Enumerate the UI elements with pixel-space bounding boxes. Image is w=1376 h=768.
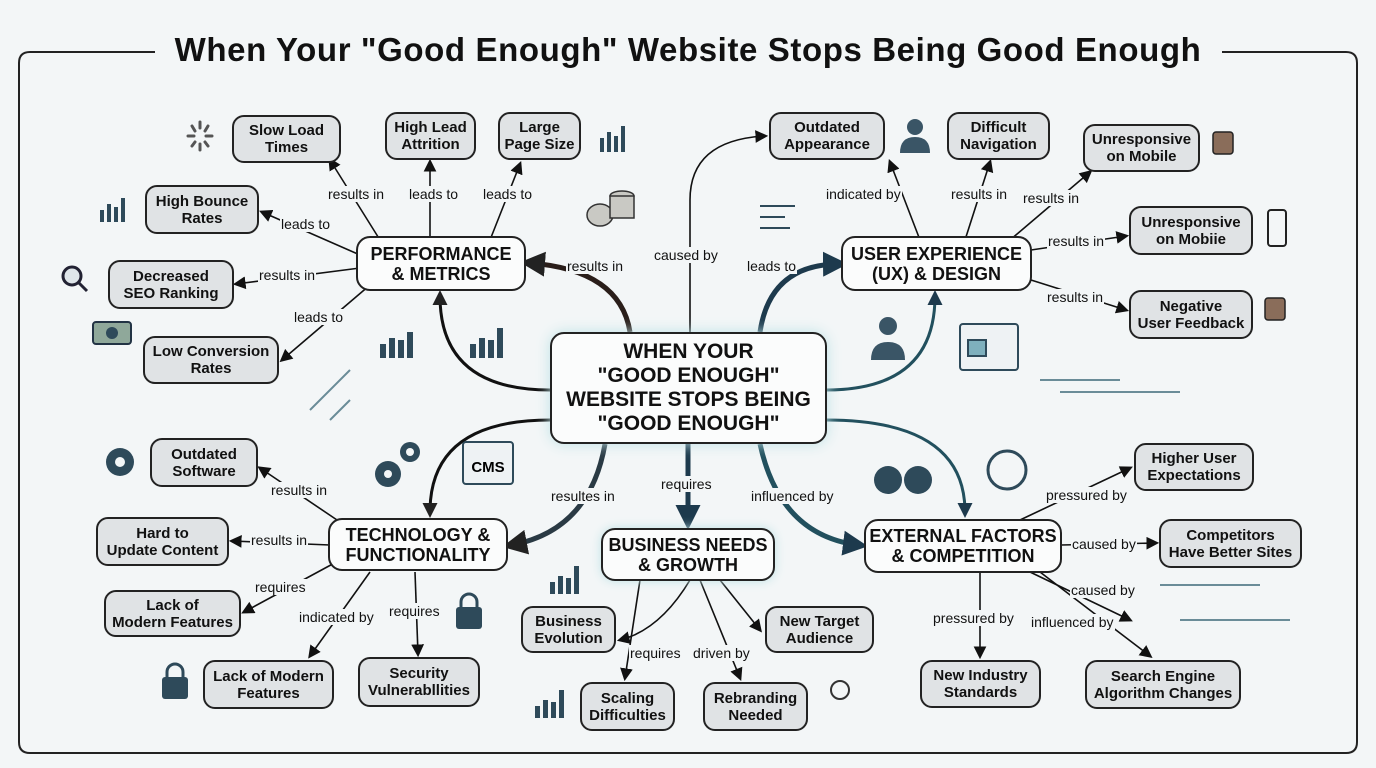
text: results in — [1047, 289, 1103, 305]
text: Decreased — [133, 268, 209, 284]
text: Rates — [182, 210, 222, 226]
icon: list — [760, 206, 795, 228]
text: Low Conversion — [153, 343, 269, 360]
text: Audience — [786, 630, 853, 646]
text: Hard to — [136, 524, 189, 542]
text: requires — [630, 645, 681, 661]
text: Standards — [944, 684, 1017, 701]
text: leads to — [281, 216, 330, 232]
leaves: Slow Load — [249, 122, 324, 139]
text: caused by — [1072, 536, 1136, 552]
icon: binoculars — [874, 466, 932, 494]
text: Rebranding — [714, 690, 797, 706]
text: Unresponsive — [1141, 214, 1241, 230]
text: Difficult — [971, 119, 1026, 136]
hub: technology: FUNCTIONALITY — [346, 544, 490, 564]
text: Outdated — [794, 119, 860, 136]
hub: technology: TECHNOLOGY & — [346, 524, 490, 544]
text: Page Size — [504, 136, 575, 153]
icon: locks — [162, 607, 482, 699]
decorative speed lines — [310, 370, 1290, 620]
text: results in — [328, 186, 384, 202]
text: results in — [271, 482, 327, 498]
hub: performance: & METRICS — [391, 264, 490, 284]
text: results in — [1048, 233, 1104, 249]
text: leads to — [747, 258, 796, 274]
icon: cms: CMS — [471, 459, 505, 476]
text: High Bounce — [156, 192, 248, 210]
hub: external: EXTERNAL FACTORS — [869, 526, 1057, 546]
icon: spinner — [188, 122, 212, 150]
text: Features — [237, 684, 300, 702]
text: influenced by — [751, 488, 834, 504]
text: Navigation — [960, 136, 1037, 153]
leaves — [232, 115, 341, 163]
text: results in — [251, 532, 307, 548]
text: Scaling — [601, 690, 654, 706]
text: New Industry — [933, 667, 1028, 684]
text: caused by — [1071, 582, 1135, 598]
hub: business: & GROWTH — [638, 554, 738, 574]
text: Algorithm Changes — [1094, 684, 1232, 702]
text: User Feedback — [1138, 314, 1244, 332]
text: Search Engine — [1111, 668, 1215, 684]
text: requires — [389, 603, 440, 619]
icon: cms — [463, 442, 513, 484]
icon: compass — [988, 451, 1026, 489]
text: influenced by — [1031, 614, 1114, 630]
text: Unresponsive — [1092, 131, 1191, 148]
text: resultes in — [551, 488, 615, 504]
icon: people — [871, 119, 930, 360]
text: Appearance — [784, 136, 870, 153]
text: Business — [535, 612, 602, 630]
icon: phone — [1268, 210, 1286, 246]
icon: bulb — [831, 681, 849, 699]
text: results in — [259, 267, 315, 283]
text: on Mobile — [1106, 148, 1176, 165]
text: Negative — [1160, 298, 1222, 314]
text: High Lead — [394, 119, 467, 136]
text: results in — [567, 258, 623, 274]
text: requires — [255, 579, 306, 595]
text: caused by — [654, 247, 718, 263]
text: New Target — [780, 612, 859, 630]
hub: performance: PERFORMANCE — [370, 244, 512, 264]
hub: external: & COMPETITION — [891, 546, 1034, 566]
text: Higher User — [1151, 450, 1237, 467]
leaves: Times — [265, 139, 308, 156]
text: Update Content — [107, 542, 218, 558]
text: Needed — [728, 706, 783, 724]
text: Vulnerabllities — [368, 682, 470, 699]
main branches — [430, 263, 965, 545]
icon: bar charts — [100, 126, 625, 718]
hub: performance — [356, 236, 526, 291]
text: Attrition — [401, 136, 460, 153]
hub: ux — [841, 236, 1032, 291]
hub: ux: USER EXPERIENCE — [851, 244, 1022, 264]
text: Modern Features — [112, 614, 233, 630]
icon: gears — [106, 442, 420, 487]
text: pressured by — [1046, 487, 1127, 503]
text: leads to — [409, 186, 458, 202]
hub: center: "GOOD ENOUGH" — [597, 364, 780, 387]
text: driven by — [693, 645, 750, 661]
text: Outdated — [171, 446, 237, 462]
icon: thumbs down — [1213, 132, 1285, 320]
text: Large — [519, 119, 560, 136]
text: results in — [1023, 190, 1079, 206]
hub: center: WHEN YOUR — [623, 340, 754, 363]
text: results in — [951, 186, 1007, 202]
text: leads to — [294, 309, 343, 325]
text: Competitors — [1186, 526, 1275, 544]
text: requires — [661, 476, 712, 492]
icon: money — [93, 322, 131, 344]
text: SEO Ranking — [123, 284, 219, 302]
hub: center: "GOOD ENOUGH" — [597, 412, 780, 435]
text: pressured by — [933, 610, 1014, 626]
text: Difficulties — [589, 706, 666, 724]
icon: magnifier — [63, 267, 87, 291]
hub: business — [601, 528, 775, 581]
text: Software — [172, 462, 236, 480]
icon: browser — [960, 324, 1018, 370]
text: Evolution — [534, 630, 603, 646]
text: on Mobiie — [1156, 230, 1226, 248]
hub: technology — [328, 518, 508, 571]
hub: ux: (UX) & DESIGN — [872, 264, 1001, 284]
text: indicated by — [299, 609, 374, 625]
text: Lack of — [146, 596, 199, 614]
link labels — [250, 186, 1137, 661]
text: leads to — [483, 186, 532, 202]
hub: external — [864, 519, 1062, 573]
text: indicated by — [826, 186, 901, 202]
text: Lack of Modern — [213, 668, 324, 684]
icon: coins — [587, 191, 634, 226]
text: Rates — [191, 360, 231, 377]
title: When Your "Good Enough" Website Stops Being Good Enough — [175, 31, 1201, 68]
hub: center — [550, 332, 827, 444]
text: Expectations — [1147, 467, 1241, 484]
hub: center: WEBSITE STOPS BEING — [566, 388, 811, 411]
text: Security — [389, 665, 449, 682]
hub: business: BUSINESS NEEDS — [608, 534, 768, 554]
text: Have Better Sites — [1169, 544, 1292, 560]
